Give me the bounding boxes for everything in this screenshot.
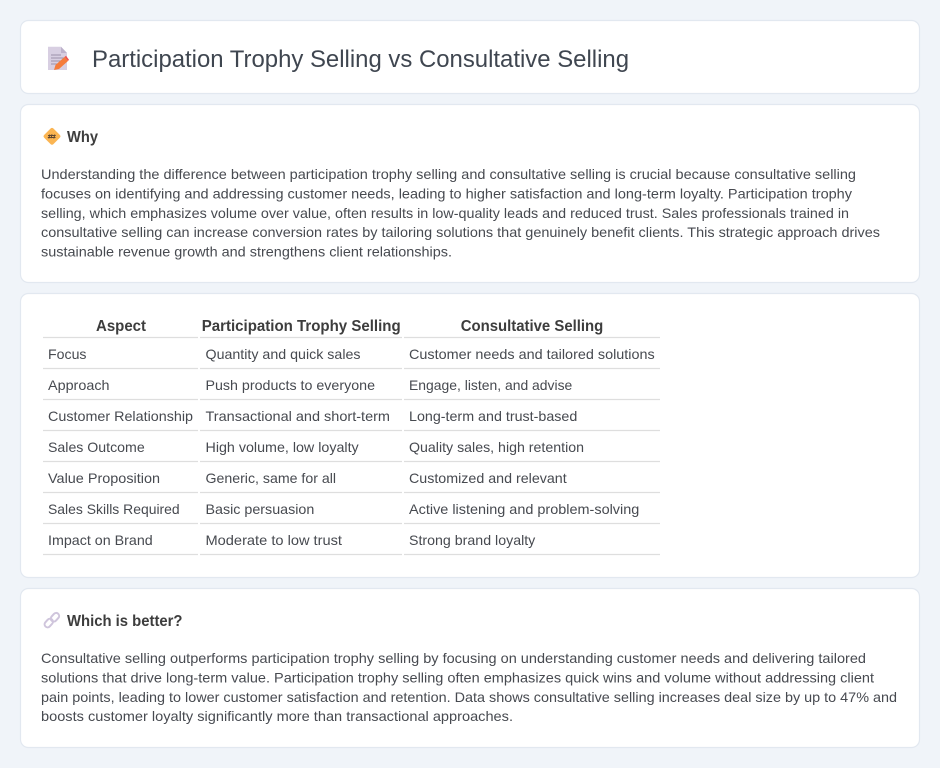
text block: why paragraph: consultative selling can increase conversion rates by tailoring solutions that genuinely benefit clients. This strategic approach drives xyxy=(41,224,880,240)
table row: approach: Push products to everyone xyxy=(206,377,375,393)
table row: sales skills required xyxy=(48,501,639,517)
text block: why paragraph: Understanding the difference between participation trophy selling and consultative selling is crucial because consultative selling xyxy=(41,166,856,182)
table row: impact on brand: Strong brand loyalty xyxy=(409,532,535,548)
icon: document with pencil xyxy=(48,47,69,70)
text block: why paragraph: sustainable revenue growth and strengthens client relationships. xyxy=(41,244,452,260)
text block: which is better paragraph: boosts customer loyalty significantly more than transactional approaches. xyxy=(41,708,513,724)
text block: why paragraph xyxy=(41,166,880,260)
table row: value proposition: Customized and relevant xyxy=(409,470,567,486)
table row: customer relationship: Long-term and trust-based xyxy=(409,408,577,424)
icon: warning diamond xyxy=(43,127,61,145)
panel: which is better xyxy=(20,588,920,748)
table row: focus: Focus xyxy=(48,346,86,362)
table row: sales skills required: Active listening and problem-solving xyxy=(409,501,639,517)
table row: impact on brand xyxy=(48,532,535,548)
table header xyxy=(96,318,603,335)
table row: sales outcome: Quality sales, high retention xyxy=(409,439,584,455)
table header: Aspect xyxy=(96,318,147,335)
table row: value proposition xyxy=(48,470,567,486)
table row: approach: Approach xyxy=(48,377,110,393)
text block: which is better paragraph xyxy=(41,650,897,724)
table row: focus: Customer needs and tailored solutions xyxy=(409,346,655,362)
text block: which is better paragraph: Consultative selling outperforms participation trophy selling by focusing on understanding customer needs and delivering tailored xyxy=(41,650,866,666)
icon: chain link xyxy=(43,612,60,629)
table row: sales skills required: Sales Skills Required xyxy=(48,501,180,517)
table row: focus: Quantity and quick sales xyxy=(206,346,360,362)
table row: customer relationship xyxy=(48,408,577,424)
table row: impact on brand: Moderate to low trust xyxy=(206,532,342,548)
text block: which is better paragraph: solutions that drive long-term value. Participation trophy selling often emphasizes quick wins and volume without addressing client xyxy=(41,669,874,685)
table row: value proposition: Generic, same for all xyxy=(206,470,336,486)
table row: sales outcome: Sales Outcome xyxy=(48,439,145,455)
panel: title header xyxy=(20,20,920,94)
table row: impact on brand: Impact on Brand xyxy=(48,532,153,548)
table row: sales outcome: High volume, low loyalty xyxy=(206,439,359,455)
title: Participation Trophy Selling vs Consultative Selling xyxy=(92,46,629,73)
panel: comparison table xyxy=(20,294,920,578)
text block: why paragraph: selling, which emphasizes volume over value, often results in low-quality leads and reduced trust. Sales professionals trained in xyxy=(41,205,849,221)
heading: why: Why xyxy=(67,129,98,146)
table row: value proposition: Value Proposition xyxy=(48,470,160,486)
table row: sales outcome xyxy=(48,439,584,455)
panel: why xyxy=(20,104,920,282)
text block: which is better paragraph: pain points, leading to lower customer satisfaction and retention. Data shows consultative selling increases deal size by up to 47% and xyxy=(41,689,897,705)
heading: which is better: Which is better? xyxy=(67,613,182,630)
table row: customer relationship: Customer Relationship xyxy=(48,408,193,424)
text block: why paragraph: focuses on identifying and addressing customer needs, leading to higher satisfaction and long-term loyalty. Participation trophy xyxy=(41,185,852,201)
table header: Consultative Selling xyxy=(461,318,603,335)
table row: sales skills required: Basic persuasion xyxy=(206,501,314,517)
table header: Participation Trophy Selling xyxy=(202,318,401,335)
table row: approach: Engage, listen, and advise xyxy=(409,377,573,393)
table row: focus xyxy=(48,346,655,362)
table row: approach xyxy=(48,377,573,393)
table row: customer relationship: Transactional and short-term xyxy=(206,408,390,424)
